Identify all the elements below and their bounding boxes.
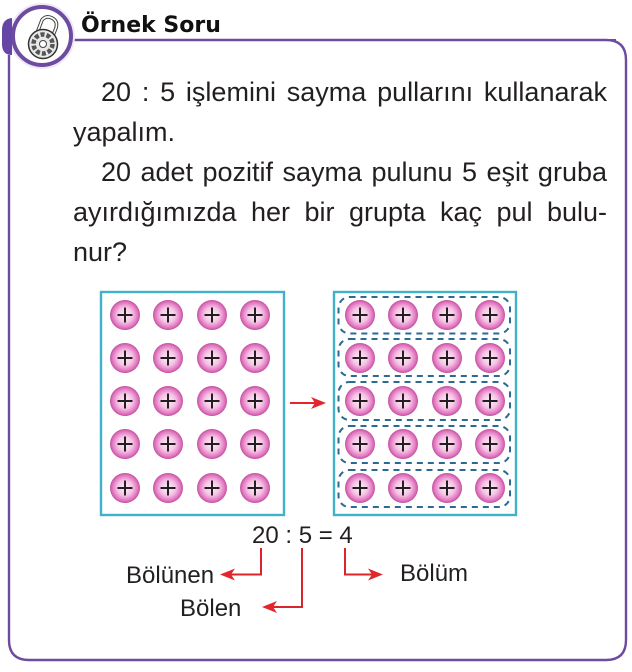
label: Bölüm: Bölüm [400, 560, 468, 587]
text: question line 4: ayırdığımızda her bir grupta kaç pul bulu- [73, 197, 607, 227]
heading underline [76, 39, 616, 41]
panel: right box of grouped counters [334, 292, 516, 515]
text: question line 1: 20 : 5 işlemini sayma pullarını kullanarak [101, 77, 607, 107]
text: question line 3: 20 adet pozitif sayma pulunu 5 eşit gruba [101, 157, 607, 187]
arrow: to Bölüm [345, 548, 372, 574]
counters: twenty positive counters [110, 300, 270, 503]
icon: lock badge [2, 5, 73, 67]
heading: Örnek Soru [81, 13, 221, 38]
dashed group outlines [338, 297, 510, 507]
arrow: to Bölen [273, 548, 302, 607]
label: Bölen: Bölen [180, 595, 241, 622]
arrow: to Bölünen [231, 548, 261, 574]
panel: left box of counters [101, 292, 284, 515]
equation: 20 : 5 = 4 [252, 522, 353, 549]
counters: five groups of four [345, 300, 505, 503]
label: Bölünen: Bölünen [126, 562, 214, 589]
text: question line 2: yapalım. [73, 117, 175, 147]
arrow: between boxes [290, 402, 315, 404]
text: question line 5: nur? [73, 237, 127, 267]
